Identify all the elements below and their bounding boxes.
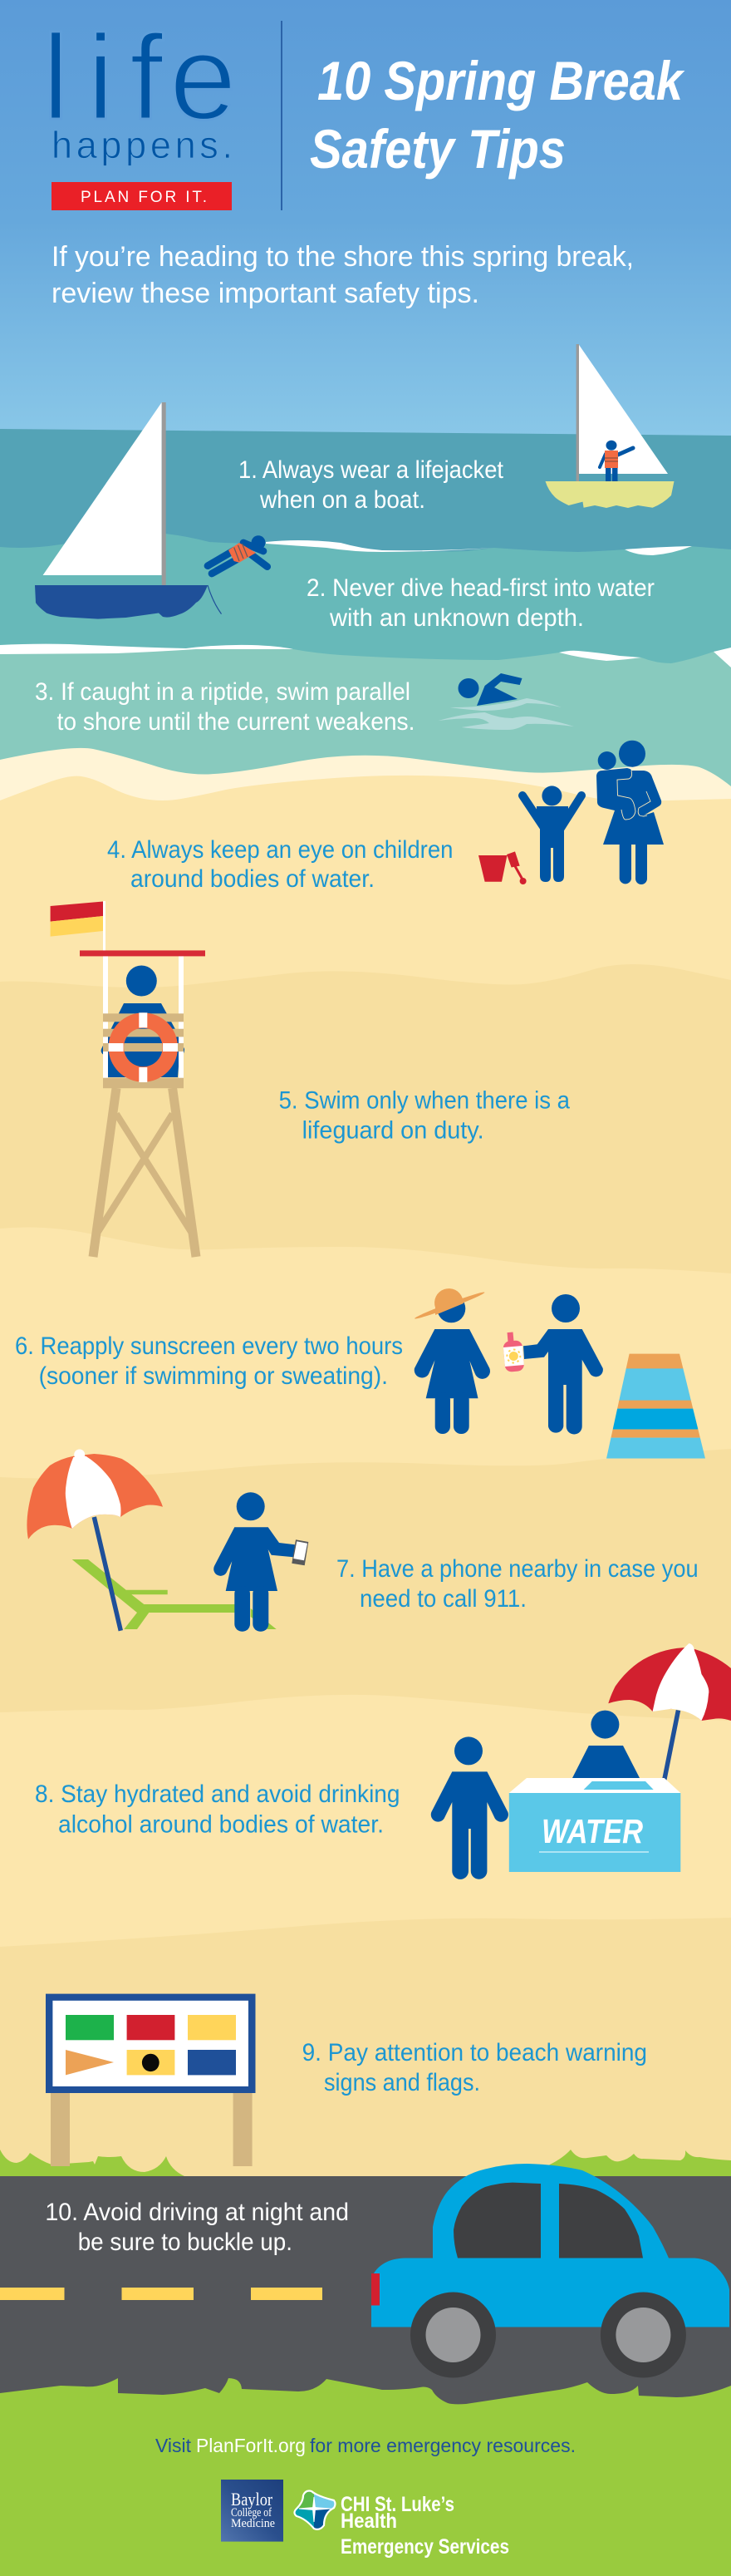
tip 1: when on a boat. (259, 486, 425, 514)
logo text: CHI St. Luke's Health Emergency Services: Health (341, 2510, 397, 2533)
footer link text: PlanForIt.org (196, 2435, 306, 2456)
lifeguard chair slats (103, 1013, 184, 1088)
tip 4 (107, 836, 454, 893)
tip 8: alcohol around bodies of water. (58, 1811, 384, 1839)
background: middle water wave (0, 534, 731, 690)
icon: bucket and shovel (478, 851, 527, 884)
icon: blue car (371, 2164, 729, 2377)
car wheels (410, 2293, 686, 2377)
tip 3 (35, 678, 415, 736)
tip 8 (35, 1781, 400, 1839)
logo banner: plan for it (52, 182, 232, 210)
intro text (52, 241, 634, 309)
logo word: life: life (42, 10, 237, 145)
icon: man waiting for water (431, 1736, 508, 1879)
logo: Baylor College of Medicine: Baylor (231, 2489, 273, 2510)
title: Safety Tips (310, 118, 566, 180)
tip 9 (302, 2039, 647, 2096)
foam: lower right crests (559, 648, 731, 667)
title: 10 Spring Break (317, 50, 685, 111)
logo text: CHI St. Luke's Health Emergency Services: Emergency Services (341, 2535, 509, 2559)
tower flag (51, 901, 105, 951)
icon: parent carrying child (596, 741, 664, 884)
tip 9: 9. Pay attention to beach warning (302, 2039, 647, 2066)
road centre dashes (0, 2288, 322, 2300)
icon: striped towel stack (606, 1353, 705, 1459)
icon: swimmer with waves (439, 673, 574, 730)
background: shallow water (0, 649, 731, 798)
logo: Baylor College of Medicine (221, 2480, 283, 2542)
icon: man with sunscreen bottle (502, 1294, 603, 1435)
tip 4: 4. Always keep an eye on children (107, 836, 454, 864)
background: sand band 6 (0, 1918, 731, 2194)
tip 2: 2. Never dive head-first into water (307, 574, 655, 602)
icon: small sailboat with person in lifejacket (545, 344, 675, 508)
sun hat (414, 1288, 485, 1321)
tip 7 (336, 1555, 699, 1613)
logo: Baylor College of Medicine: College of (231, 2506, 272, 2519)
background: wet sand (0, 748, 731, 831)
tip 10: 10. Avoid driving at night and (45, 2199, 349, 2226)
logo: life happens plan for it (42, 10, 237, 210)
icon: orange beach umbrella (27, 1450, 163, 1631)
tip 3: to shore until the current weakens. (56, 708, 415, 736)
tip 5 (279, 1087, 570, 1145)
icon: child with raised arms (522, 786, 581, 882)
icon: lifeguard tower (51, 901, 205, 1257)
tip 6: 6. Reapply sunscreen every two hours (15, 1332, 403, 1360)
intro text: review these important safety tips. (52, 278, 479, 309)
life ring (109, 1012, 178, 1082)
tip 1: 1. Always wear a lifejacket (238, 456, 504, 484)
background: sand band 2 (0, 964, 731, 1280)
foam: upper wave crests (266, 540, 692, 555)
logo text: CHI St. Luke's Health Emergency Services: CHI St. Luke’s (341, 2493, 454, 2516)
sunscreen bottle (502, 1332, 524, 1372)
foam: lower left crest (0, 644, 293, 655)
tip 10: be sure to buckle up. (78, 2229, 292, 2256)
intro text: If you’re heading to the shore this spring break, (52, 241, 634, 273)
tip 10 (45, 2199, 349, 2256)
tip 7: need to call 911. (360, 1585, 527, 1613)
icon: beach chair (72, 1559, 277, 1629)
tip 2: with an unknown depth. (329, 604, 584, 632)
background: sand band 4 (0, 1449, 731, 1729)
icon: water vendor and stand (509, 1711, 680, 1872)
tip 2 (307, 574, 655, 632)
logo: CHI St. Luke's Health cross (293, 2490, 336, 2530)
logo banner: plan for it: PLAN FOR IT. (81, 189, 207, 206)
logo word: happens: happens. (52, 124, 233, 166)
tip 7: 7. Have a phone nearby in case you (336, 1555, 699, 1583)
footer link text: for more emergency resources. (310, 2435, 576, 2456)
title (310, 50, 685, 180)
tip 9: signs and flags. (324, 2069, 480, 2096)
icon: red beach umbrella (608, 1643, 731, 1780)
footer link text (155, 2435, 576, 2456)
background: sand band 3 (0, 1228, 731, 1488)
tip 6 (15, 1332, 403, 1390)
tip 5: lifeguard on duty. (302, 1117, 484, 1145)
footer link text: Visit (155, 2435, 192, 2456)
tip 3: 3. If caught in a riptide, swim parallel (35, 678, 410, 706)
tower legs (93, 1088, 196, 1257)
lifeguard figure (101, 966, 184, 1077)
icon: diver with lifejacket (208, 535, 267, 574)
phone (292, 1539, 308, 1565)
tip 5: 5. Swim only when there is a (279, 1087, 570, 1115)
background: grass (0, 2150, 731, 2576)
tip 8: 8. Stay hydrated and avoid drinking (35, 1781, 400, 1808)
tip 4: around bodies of water. (130, 865, 375, 893)
icon: person with phone (213, 1492, 308, 1632)
background: sand band 1 (0, 776, 731, 997)
background: sand band 5 (0, 1695, 731, 1953)
icon: beach warning sign with flags (46, 1994, 256, 2166)
water label: WATER (542, 1812, 643, 1850)
icon: woman with sun hat (414, 1288, 490, 1434)
background: sky (0, 0, 731, 441)
background: deep sea (0, 429, 731, 665)
logo: Baylor College of Medicine: Medicine (231, 2517, 275, 2530)
logo text: CHI St. Luke's Health Emergency Services (341, 2493, 509, 2559)
tip 1 (238, 456, 504, 514)
icon: large sailboat (35, 402, 221, 619)
background: road (0, 2176, 731, 2404)
tip 6: (sooner if swimming or sweating). (39, 1362, 388, 1390)
